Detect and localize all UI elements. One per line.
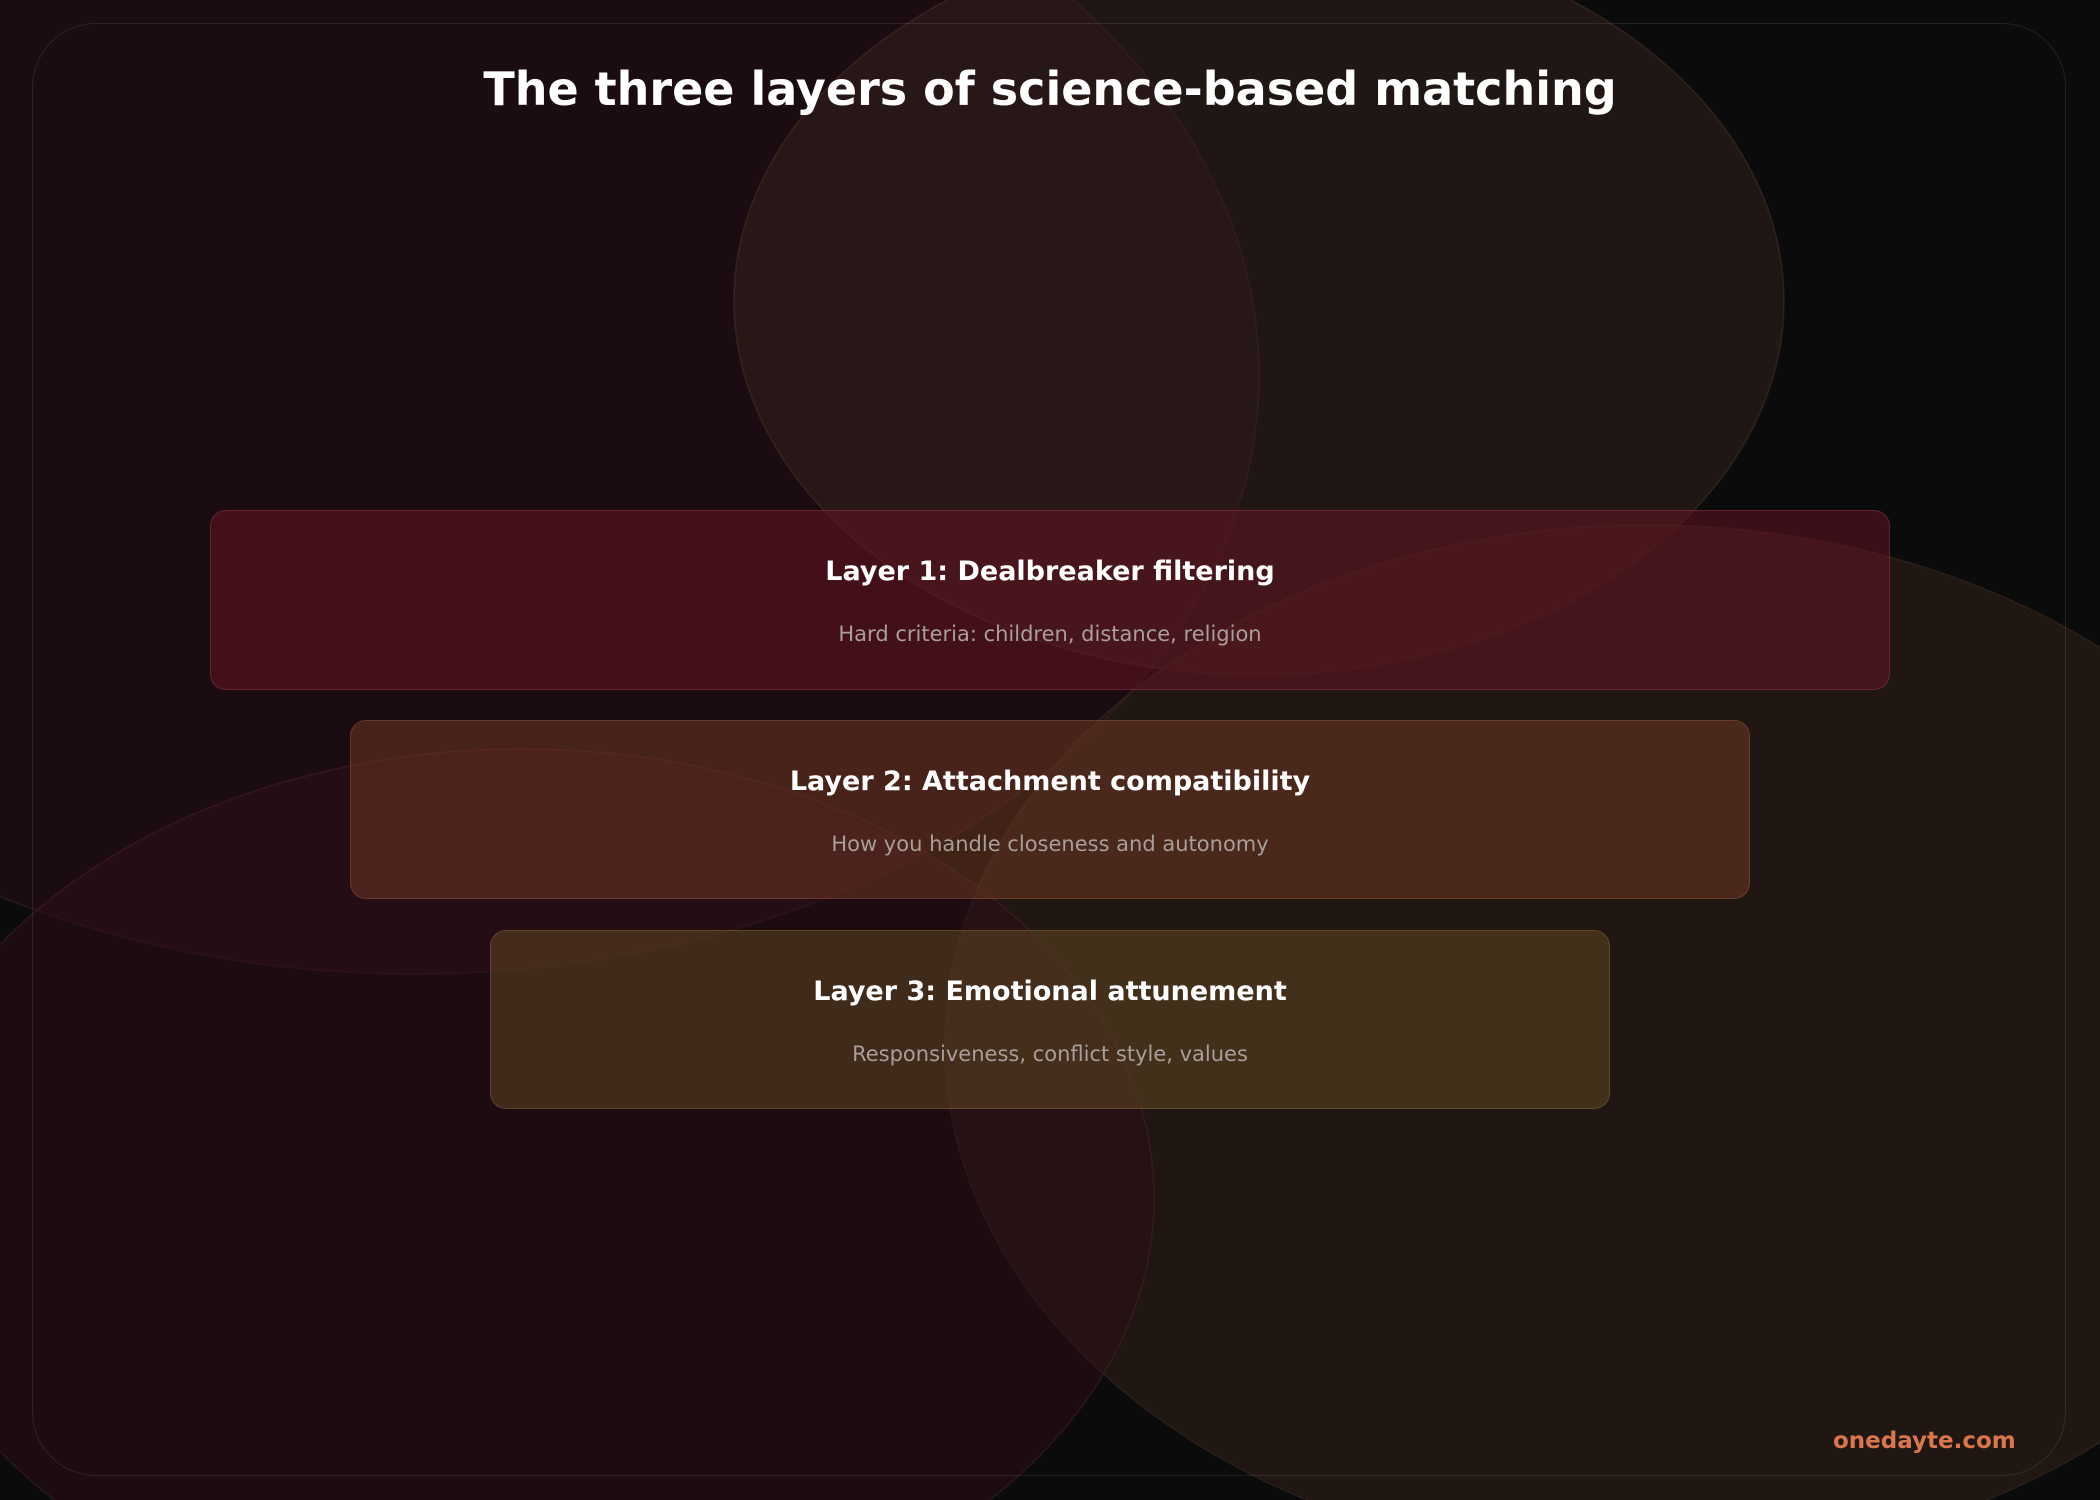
text: layer 1: Hard criteria: children, distance, religion bbox=[838, 622, 1262, 646]
panel: layer 2 bbox=[350, 720, 1750, 899]
footer brand: onedayte.com bbox=[1833, 1428, 2016, 1454]
panel: layer 1 bbox=[210, 510, 1890, 690]
text: layer 2: How you handle closeness and autonomy bbox=[831, 832, 1269, 856]
text: layer 3: Responsiveness, conflict style, values bbox=[852, 1042, 1248, 1066]
heading: layer 1: Layer 1: Dealbreaker filtering bbox=[825, 556, 1275, 587]
heading: layer 2: Layer 2: Attachment compatibility bbox=[790, 766, 1310, 797]
heading: layer 3: Layer 3: Emotional attunement bbox=[813, 976, 1287, 1007]
title: The three layers of science-based matching bbox=[483, 62, 1617, 116]
panel: layer 3 bbox=[490, 930, 1610, 1109]
